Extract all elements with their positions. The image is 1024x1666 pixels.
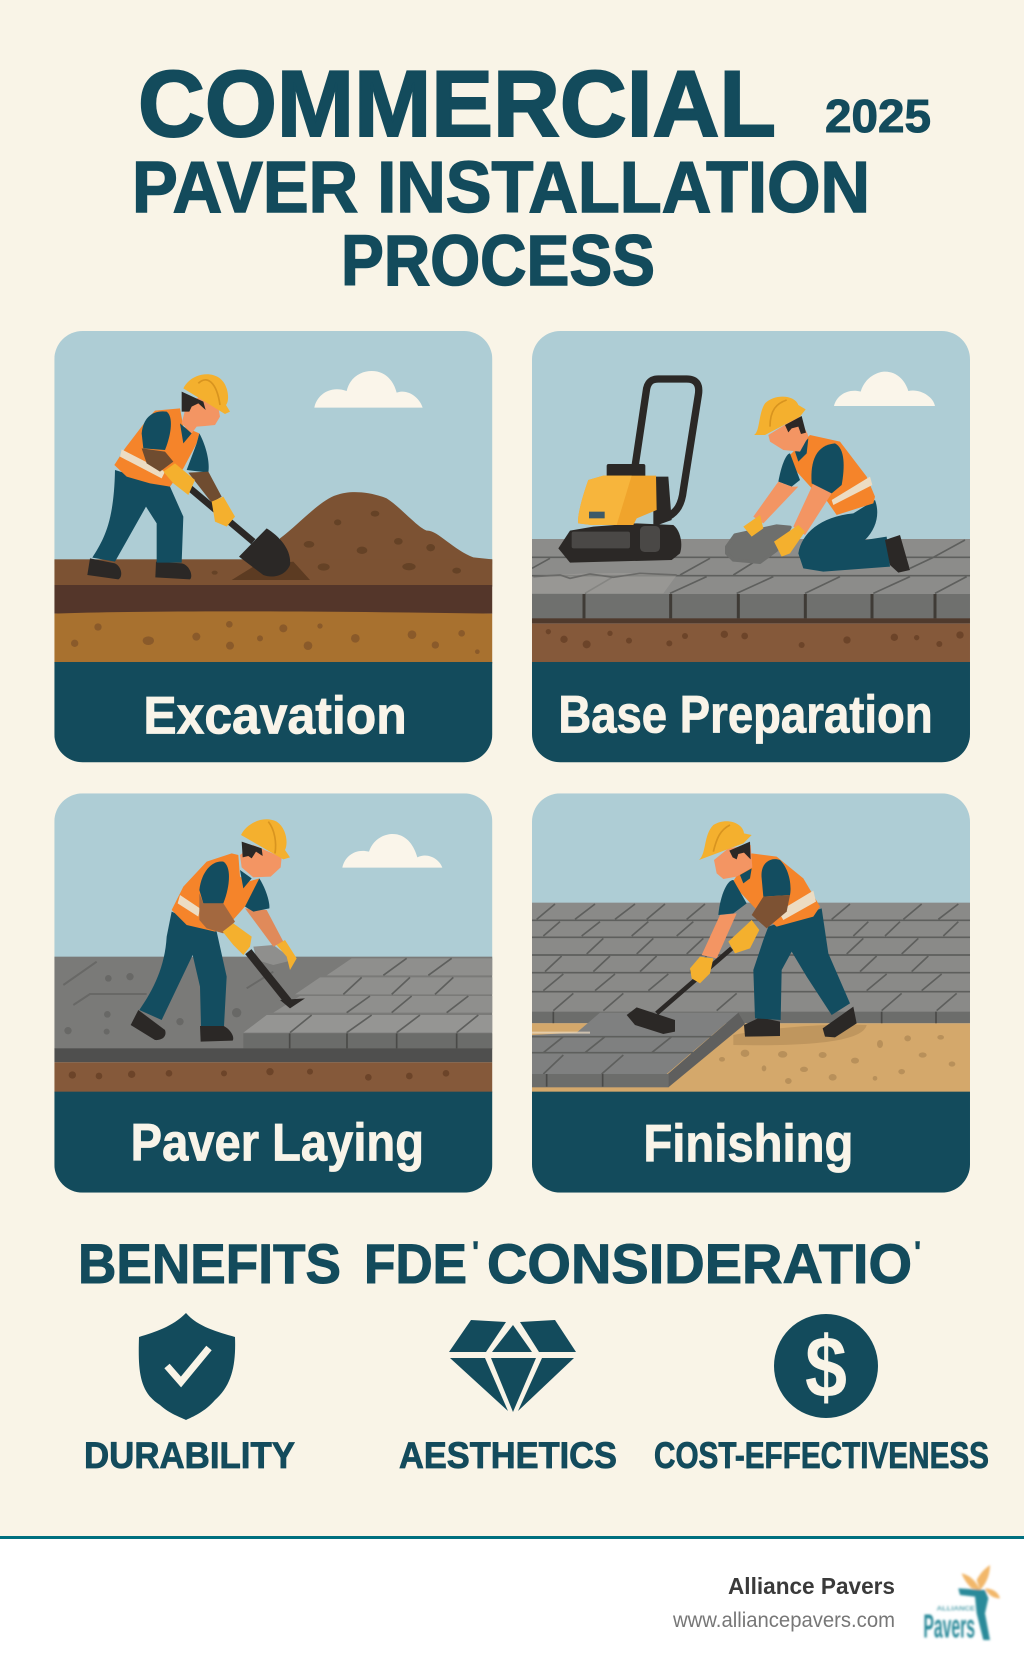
- icon: diamond: [449, 1320, 576, 1412]
- icon: dollar coin: $: [805, 1319, 847, 1416]
- benefit: durability: DURABILITY: [84, 1435, 295, 1476]
- label: paver laying: Paver Laying: [131, 1114, 424, 1173]
- benefits heading: ': [914, 1236, 921, 1269]
- benefit: durability: [84, 1313, 295, 1476]
- title: PROCESS: [341, 222, 655, 301]
- pavers and sand: [532, 903, 970, 1092]
- benefits heading: FDE: [364, 1232, 467, 1295]
- benefits heading: BENEFITS: [78, 1232, 341, 1295]
- plate compactor: [558, 379, 699, 563]
- benefits heading: [78, 1232, 921, 1295]
- benefit: cost-effectiveness: [654, 1314, 989, 1476]
- icon: cloud: [342, 834, 442, 868]
- soil layers: [54, 492, 492, 663]
- brand name: Alliance Pavers: [728, 1573, 895, 1599]
- label: finishing: Finishing: [643, 1115, 853, 1174]
- panel: excavation: [54, 331, 492, 762]
- benefit: aesthetics: [399, 1320, 617, 1476]
- panel: base preparation: [532, 331, 970, 762]
- footer: [0, 1536, 1024, 1666]
- icon: logo: [923, 1565, 1000, 1645]
- worker placing block: [727, 397, 910, 573]
- icon: cloud: [834, 372, 935, 406]
- benefits heading: ': [472, 1236, 479, 1269]
- panel: paver laying: [54, 793, 492, 1193]
- panel: finishing: [532, 793, 970, 1193]
- title: PAVER INSTALLATION: [132, 148, 870, 228]
- pavers and soil: [532, 539, 970, 664]
- worker with shovel: [87, 374, 290, 579]
- icon: logo: ALLIANCE: [937, 1606, 976, 1613]
- title: 2025: [825, 90, 931, 142]
- worker with broom: [627, 821, 857, 1037]
- icon: cloud: [314, 371, 423, 408]
- icon: dollar coin: [774, 1314, 878, 1418]
- worker laying pavers: [131, 819, 305, 1042]
- title: [132, 51, 931, 301]
- title: COMMERCIAL: [138, 51, 776, 156]
- ground and pavers: [54, 957, 492, 1092]
- benefit: aesthetics: AESTHETICS: [399, 1435, 617, 1476]
- label: base preparation: Base Preparation: [558, 686, 933, 745]
- benefits heading: CONSIDERATIO: [487, 1232, 912, 1295]
- website: www.alliancepavers.com: [672, 1609, 895, 1632]
- label: excavation: Excavation: [143, 686, 407, 745]
- icon: shield with check: [139, 1313, 235, 1420]
